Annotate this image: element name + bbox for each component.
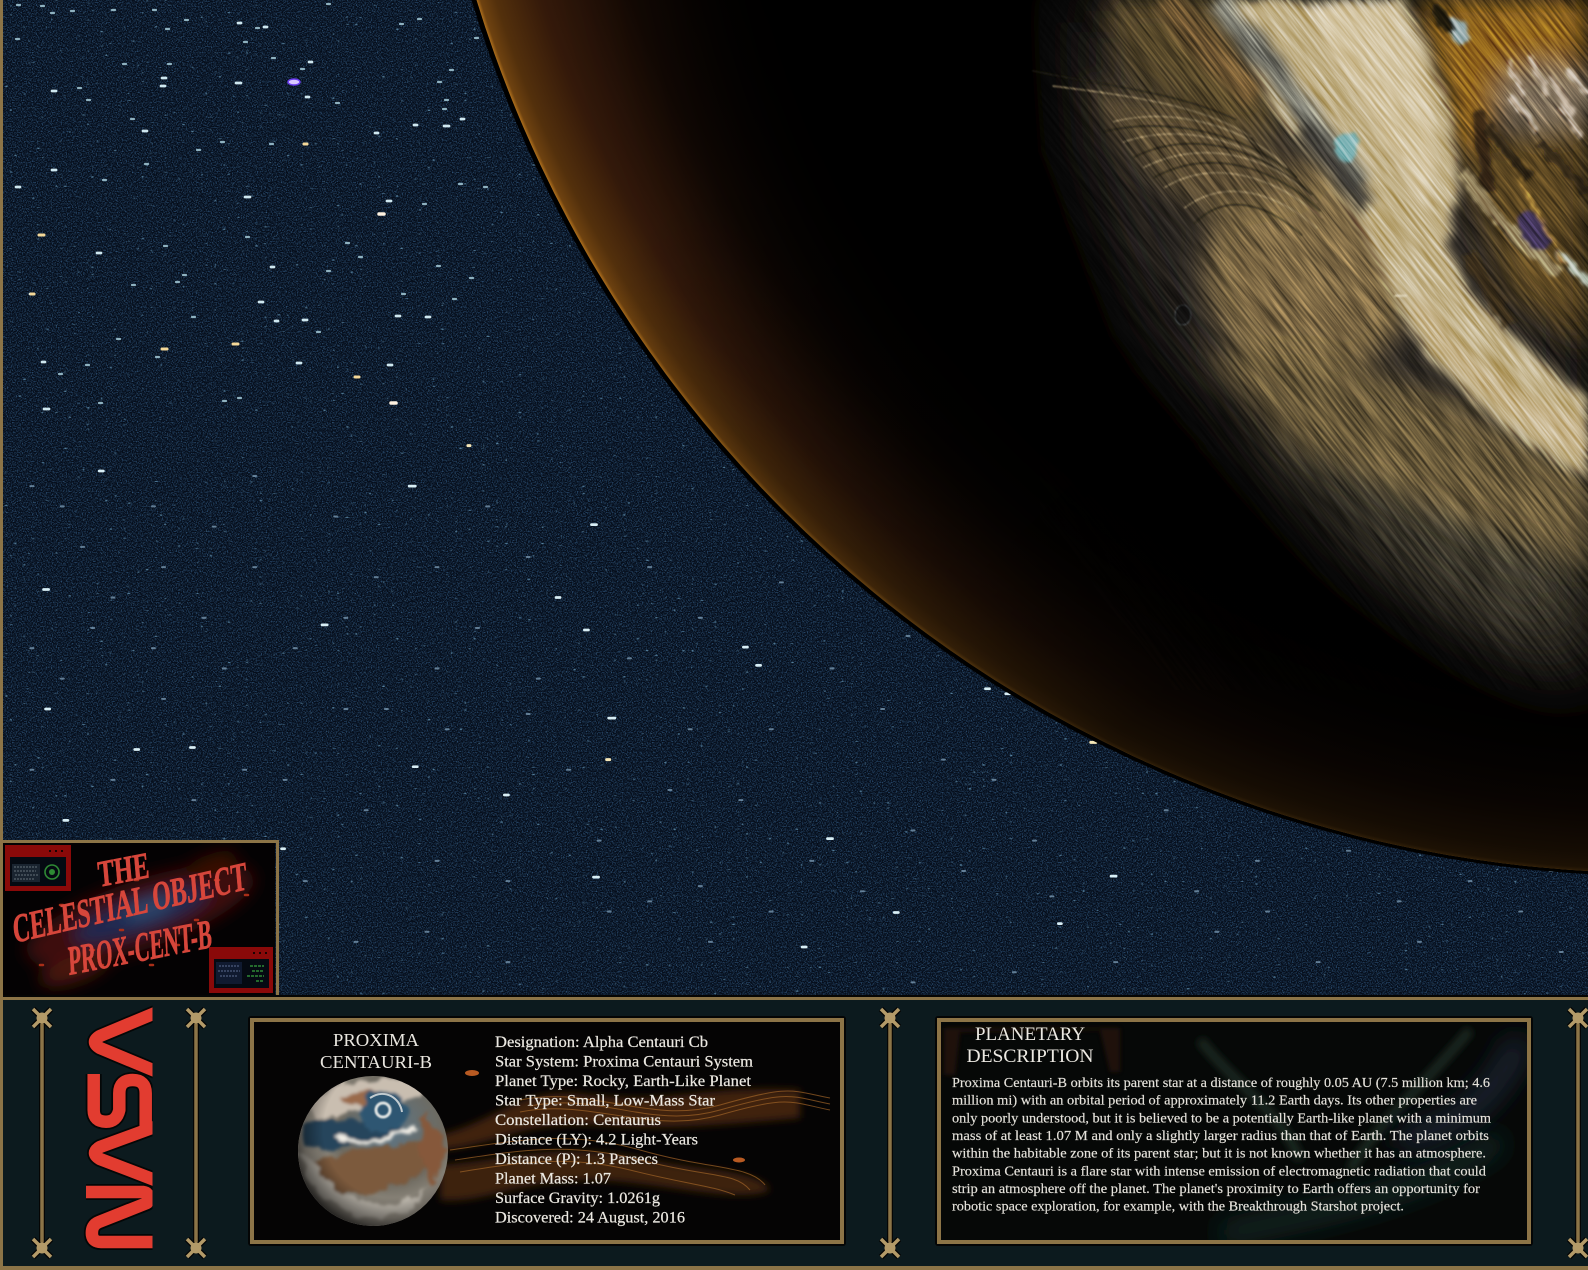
planet facts list (495, 1034, 753, 1226)
title card (3, 841, 279, 995)
ornamental rule 3 (881, 1009, 899, 1257)
description heading: PLANETARY (975, 1025, 1085, 1045)
brown swirl and gold regions (1084, 0, 1588, 567)
title text (11, 845, 249, 984)
description body: Proxima Centauri-B orbits its parent star at a distance of roughly 0.05 AU (7.5 million km; 4.6 (952, 1075, 1490, 1091)
planet: dark limb with orange rim (400, 0, 1588, 900)
description body: only poorly understood, but it is believed to be a potentially Earth-like planet with a minimum (952, 1110, 1491, 1125)
planet surface: lit clouds (1033, 0, 1588, 689)
description body (952, 1075, 1491, 1214)
description heading: DESCRIPTION (966, 1047, 1094, 1067)
stars: warm and coloured (31, 144, 359, 377)
planet name (320, 1030, 432, 1072)
cream cloud band (1165, 0, 1588, 481)
star: violet (288, 79, 300, 85)
star field background (0, 0, 1588, 1000)
swirling background art (944, 1028, 1520, 1235)
ornamental rule 4 (1569, 1009, 1587, 1257)
planet facts list: Discovered: 24 August, 2016 (495, 1210, 685, 1226)
terminator haze (1074, 0, 1588, 689)
planet facts list: Designation: Alpha Centauri Cb (495, 1034, 708, 1051)
description body: robotic space exploration, for example, with the Breakthrough Starshot project. (952, 1199, 1404, 1214)
planet facts list: Star Type: Small, Low-Mass Star (495, 1092, 716, 1110)
ornamental rule 1 (33, 1009, 51, 1257)
flowing background art (440, 1070, 830, 1201)
stars: faint (30, 476, 1563, 982)
planet name: PROXIMA (333, 1030, 419, 1050)
stars: bright (16, 23, 464, 409)
planet facts list: Distance (P): 1.3 Parsecs (495, 1151, 658, 1168)
window inset: bottom right (209, 947, 273, 993)
stars: medium (16, 4, 487, 403)
window inset: top left (5, 845, 71, 891)
description heading (966, 1025, 1094, 1067)
planet facts list: Planet Type: Rocky, Earth-Like Planet (495, 1073, 752, 1090)
panel: planetary description (935, 1016, 1533, 1246)
nebula backdrop (15, 843, 267, 995)
description body: strip an atmosphere off the planet. The planet's proximity to Earth offers an opportunity for (952, 1181, 1480, 1196)
swirl streaks (1033, 71, 1406, 325)
ornamental rule 2 (187, 1009, 205, 1257)
title text: CELESTIAL OBJECT (11, 853, 249, 952)
planet name: CENTAURI-B (320, 1052, 432, 1072)
planet facts list: Constellation: Centaurus (495, 1112, 661, 1129)
planet facts list: Planet Mass: 1.07 (495, 1170, 611, 1188)
description body: Proxima Centauri is a flare star with intense emission of electromagnetic radiation that could (952, 1163, 1486, 1178)
planet facts list: Star System: Proxima Centauri System (495, 1054, 753, 1070)
title text: THE (96, 845, 151, 896)
NASA worm logo (86, 1011, 160, 1242)
planet facts list: Distance (LY): 4.2 Light-Years (495, 1132, 698, 1148)
panel: planet facts (248, 1016, 846, 1246)
description body: million mi) with an orbital period of approximately 11.2 Earth days. Its other properties are (952, 1093, 1477, 1109)
title text: PROX-CENT-B (67, 910, 213, 984)
description body: within the habitable zone of its parent star; but it is not known whether it has an atmosphere. (952, 1146, 1486, 1161)
surface texture overlay (1052, 0, 1588, 682)
description body: mass of at least 1.07 M and only a slightly larger radius than that of Earth. The planet orbits (952, 1128, 1489, 1143)
planet facts list: Surface Gravity: 1.0261g (495, 1190, 660, 1207)
mottled right side (1335, 1, 1588, 324)
planet globe (298, 1076, 448, 1226)
